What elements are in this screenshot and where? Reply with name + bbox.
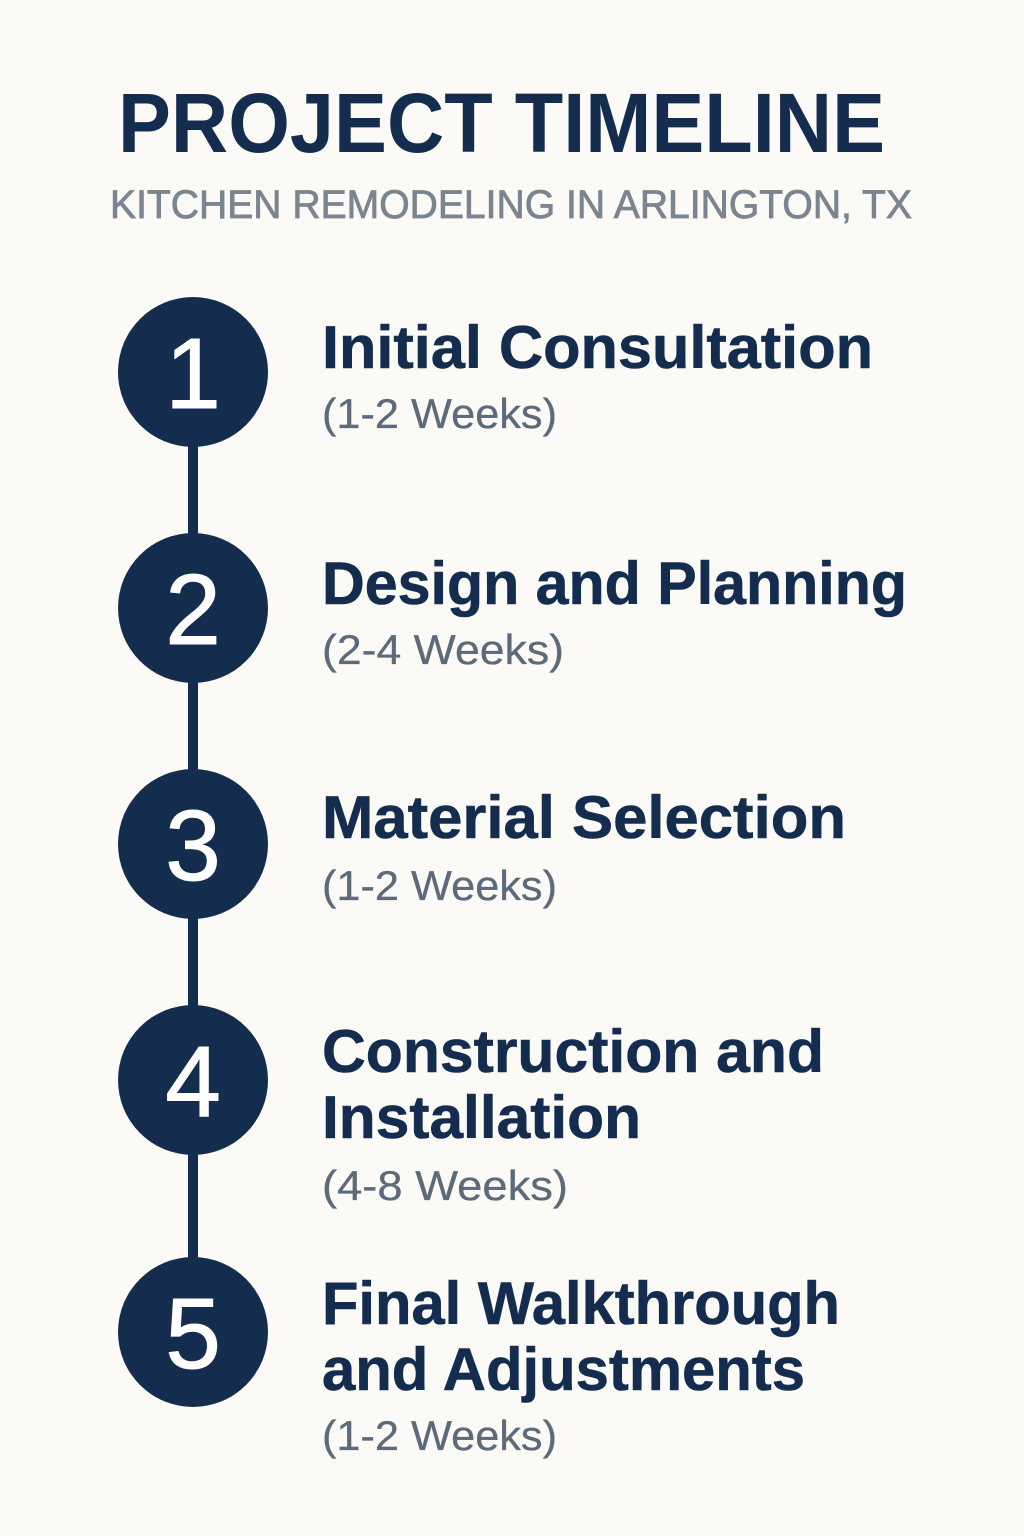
heading 3: Material Selection: [322, 784, 846, 851]
heading 5: (1-2 Weeks): [322, 1412, 557, 1459]
heading 4: Construction and: [322, 1018, 824, 1085]
heading 3: [322, 784, 846, 909]
heading 1: [322, 314, 873, 437]
step 3: [118, 769, 846, 919]
circle 4: [118, 1005, 268, 1155]
circle 3: [118, 769, 268, 919]
heading 4: (4-8 Weeks): [322, 1162, 568, 1209]
heading 2: Design and Planning: [322, 550, 907, 617]
heading 5: and Adjustments: [322, 1336, 805, 1403]
circle 4: 4: [165, 1026, 221, 1138]
heading 4: [322, 1018, 824, 1209]
title: PROJECT TIMELINE: [118, 76, 885, 170]
heading 3: (1-2 Weeks): [322, 862, 557, 909]
circle 3: 3: [165, 790, 221, 902]
heading 4: Installation: [322, 1084, 641, 1151]
circle 2: 2: [165, 554, 221, 666]
subtitle: KITCHEN REMODELING IN ARLINGTON, TX: [110, 183, 912, 227]
step 1: [118, 297, 873, 447]
step 5: [118, 1257, 840, 1459]
circle 5: 5: [165, 1278, 221, 1390]
heading 5: [322, 1270, 840, 1459]
timeline connector line: [188, 372, 198, 1332]
circle 5: [118, 1257, 268, 1407]
heading 1: Initial Consultation: [322, 314, 873, 381]
heading 5: Final Walkthrough: [322, 1270, 840, 1337]
circle 2: [118, 533, 268, 683]
heading 2: [322, 550, 907, 673]
step 4: [118, 1005, 824, 1209]
circle 1: [118, 297, 268, 447]
step 2: [118, 533, 907, 683]
heading 2: (2-4 Weeks): [322, 626, 564, 673]
heading 1: (1-2 Weeks): [322, 390, 557, 437]
circle 1: 1: [165, 318, 221, 430]
